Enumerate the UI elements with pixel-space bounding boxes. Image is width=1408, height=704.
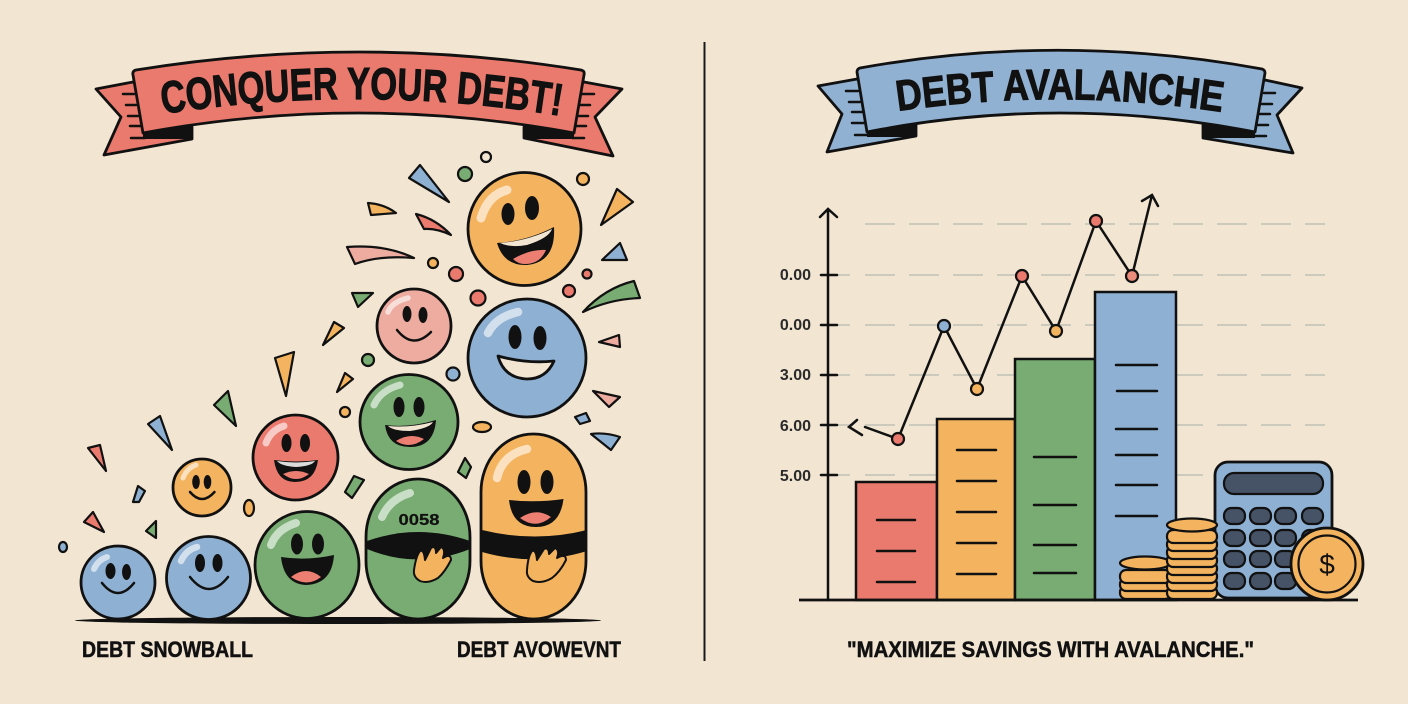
y axis labels: 5.00 [780,468,811,485]
icon: dollar coin: $ [1319,549,1335,580]
title banner: conquer your debt [94,50,624,158]
character: small blue ball [81,546,155,619]
grid stubs [837,275,850,475]
character: tall orange capsule [481,434,587,619]
bar: orange [937,419,1015,600]
y axis labels: 6.00 [780,418,811,435]
character: small orange ball [173,459,231,516]
y axis ticks [821,275,837,475]
title banner: conquer your debt: CONQUER YOUR DEBT! [161,67,562,116]
y axis labels: 0.00 [780,267,811,284]
character: green capsule with number [366,479,470,619]
character: pink ball [377,289,451,363]
y axis labels: 0.00 [780,317,811,334]
confetti [59,152,640,552]
character: red ball [253,415,338,500]
label: debt avowevnt: DEBT AVOWEVNT [457,637,621,662]
y axis labels: 3.00 [780,367,811,384]
panel: debt snowball [58,50,642,662]
title banner: debt avalanche: DEBT AVALANCHE [896,69,1224,112]
ground line [75,617,601,624]
y axis [820,209,837,600]
icon: dollar coin [1291,528,1363,600]
bar: blue [1095,292,1176,600]
character: big blue ball [468,299,586,417]
icon: calculator [1215,462,1332,598]
divider between panels [704,42,706,661]
character: green ball with open smile [360,374,458,470]
chart: bars with trend line [780,195,1325,600]
grid lines [865,224,1325,475]
title banner: debt avalanche [816,48,1304,154]
icon: coin stacks [1120,518,1217,599]
caption: maximize savings: "MAXIMIZE SAVINGS WITH AVALANCHE." [847,637,1254,662]
trend line with arrow [849,195,1158,445]
character: green ball [255,512,359,618]
bar: green [1015,359,1095,600]
bar: red [856,482,937,600]
character: big orange ball [468,172,581,286]
label: debt snowball: DEBT SNOWBALL [82,637,253,662]
y axis labels [780,267,811,485]
baseline [799,599,1358,601]
panel: debt avalanche [780,48,1364,662]
character: green capsule with number: 0058 [398,512,440,529]
character: blue ball [166,536,250,620]
